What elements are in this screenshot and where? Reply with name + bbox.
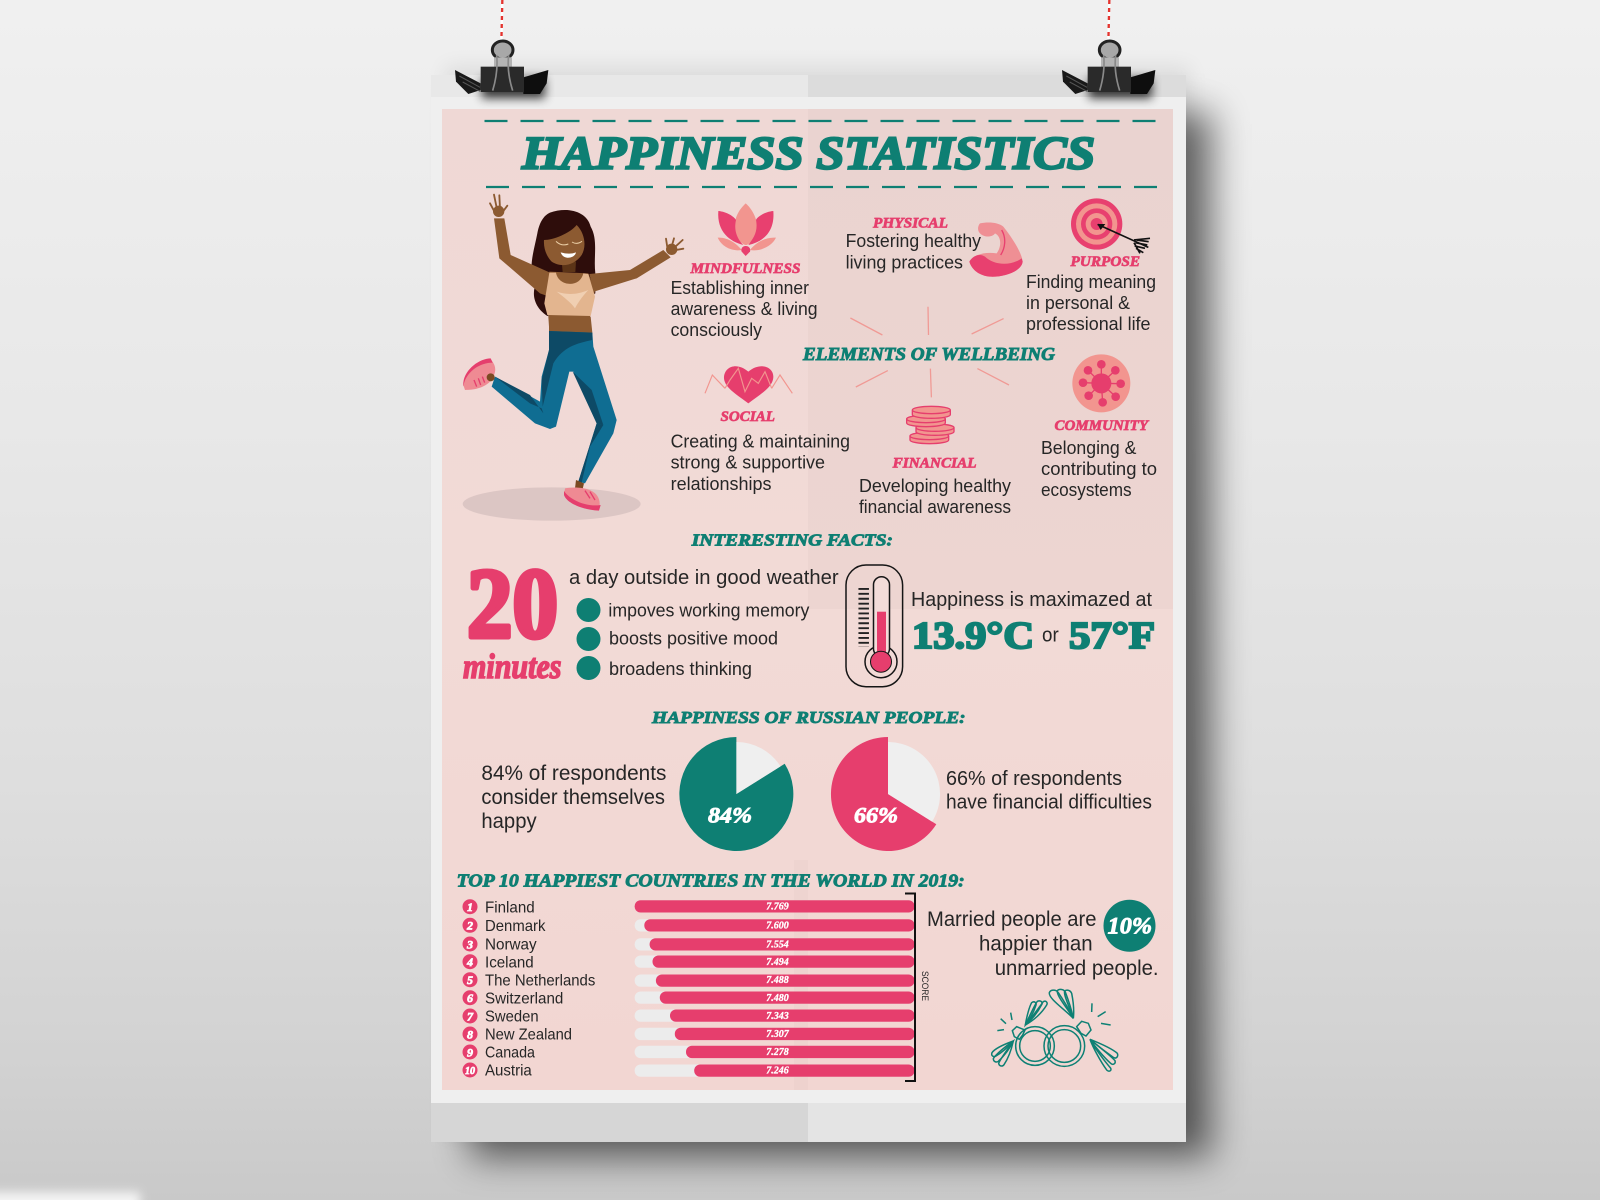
row: Austria: 7.246 [766,1066,789,1076]
row: Norway: Norway [485,936,537,954]
bar chart: top 10 countries [462,894,930,1081]
element: physical: Fostering healthy [846,231,981,251]
row: New Zealand: New Zealand [485,1027,572,1044]
row: The Netherlands [462,972,915,989]
row: Iceland: 4 [466,955,473,969]
element: physical: PHYSICAL [873,216,948,232]
element: financial: financial awareness [859,497,1011,517]
element: mindfulness: Establishing inner [671,278,809,298]
row: Switzerland: 6 [467,991,473,1005]
element: physical [846,216,1023,277]
binder clip: right [1062,0,1155,98]
row: Sweden: 7.343 [766,1011,789,1022]
row: Denmark [462,918,915,935]
icon: wedding rings [992,989,1118,1071]
row: Sweden: Sweden [485,1009,539,1026]
stat text: 84% happy: consider themselves [481,786,665,809]
element: community: COMMUNITY [1054,418,1150,434]
binder clip: left [455,0,548,98]
fact: 20 minutes: minutes [463,647,562,686]
element: social: strong & supportive [671,453,825,473]
icon: lotus [718,203,776,256]
element: mindfulness: consciously [671,320,762,340]
element: social [671,366,850,494]
badge: 10% [1104,900,1156,952]
icon: coin stacks [907,406,954,444]
row: Finland: 7.769 [766,902,789,912]
fact: 20 minutes [463,548,839,686]
row: New Zealand: 7.307 [766,1029,790,1040]
poster shadow [445,66,1212,1158]
fact: ideal temperature: or [1042,625,1059,647]
element: financial: Developing healthy [859,476,1011,496]
poster sheet [431,75,1186,1142]
pie chart: 84%: 84% [708,803,752,828]
stat text: 66% financial difficulties [946,768,1152,814]
element: community: contributing to [1041,459,1157,479]
pie chart: 84% [679,737,793,851]
row: Canada: Canada [485,1045,535,1062]
illustration: dancing woman [463,195,683,521]
row: The Netherlands: The Netherlands [485,972,595,989]
row: New Zealand [462,1026,915,1044]
row: The Netherlands: 5 [467,973,473,987]
row: Sweden [462,1008,915,1026]
row: Switzerland: 7.480 [766,993,789,1004]
element: social: relationships [671,474,772,494]
fact: ideal temperature: Happiness is maximazed at [911,589,1152,611]
element: physical: living practices [846,252,963,272]
stat text: 66% financial difficulties: have financial difficulties [946,792,1152,814]
heading: interesting facts: INTERESTING FACTS: [691,531,893,550]
element: purpose: in personal & [1026,293,1130,313]
row: Denmark: 2 [466,919,473,933]
row: Switzerland: Switzerland [485,990,563,1007]
row: Finland [462,899,915,916]
element: financial [859,406,1011,517]
icon: network circle [1072,354,1130,412]
stat text: 66% financial difficulties: 66% of respondents [946,768,1122,790]
element: mindfulness [671,203,818,340]
list: outdoor benefits: boosts positive mood [609,628,778,648]
row: Austria [462,1062,915,1080]
row: New Zealand: 8 [467,1027,473,1041]
pie chart: 66%: 66% [854,803,898,828]
row: Austria: Austria [485,1063,532,1080]
callout: married people happier: happier than [979,933,1093,956]
row: Norway: 7.554 [766,940,789,950]
row: Norway: 3 [466,937,473,951]
callout: married people happier [927,900,1159,980]
row: Iceland: 7.494 [766,957,789,968]
fact: 20 minutes: 20 [467,548,558,659]
callout: married people happier: unmarried people. [995,957,1159,980]
axis label: score: SCORE [919,971,930,1001]
element: mindfulness: awareness & living [671,299,818,319]
row: Finland: 1 [467,900,473,914]
row: The Netherlands: 7.488 [766,975,789,986]
row: Norway [462,936,915,954]
wellbeing hub: connecting rays [850,307,1009,397]
element: community [1041,354,1157,500]
row: Canada: 9 [467,1045,473,1059]
list: outdoor benefits: broadens thinking [609,659,752,679]
badge: 10%: 10% [1108,913,1152,938]
element: community: Belonging & [1041,438,1136,458]
fact: ideal temperature: 57°F [1069,615,1155,657]
heading: elements of wellbeing: ELEMENTS OF WELLBEING [802,344,1055,364]
score axis bracket [905,894,915,1081]
row: Denmark: 7.600 [766,920,789,932]
row: Canada: 7.278 [766,1047,789,1058]
element: purpose [1026,198,1156,334]
row: Sweden: 7 [467,1009,474,1023]
fact: ideal temperature: 13.9°C [912,615,1034,657]
element: purpose: PURPOSE [1070,254,1140,270]
row: Finland: Finland [485,900,535,916]
fact: ideal temperature [846,565,1155,687]
row: Denmark: Denmark [485,918,546,935]
list: outdoor benefits [576,598,809,680]
row: Austria: 10 [465,1066,475,1077]
row: Switzerland [462,990,915,1007]
callout: married people happier: Married people are [927,908,1096,931]
icon: flexed arm [969,222,1023,277]
list: outdoor benefits: impoves working memory [608,601,809,621]
element: mindfulness: MINDFULNESS [689,261,800,277]
heading: happiness of russian people: HAPPINESS OF RUSSIAN PEOPLE: [651,708,966,727]
element: financial: FINANCIAL [892,456,977,472]
row: Iceland [462,954,915,971]
element: purpose: professional life [1026,314,1150,334]
element: social: SOCIAL [720,409,775,425]
icon: heart with pulse [705,366,792,403]
icon: target with arrow [1071,198,1150,253]
element: purpose: Finding meaning [1026,272,1156,292]
heading: top 10 happiest countries: TOP 10 HAPPIEST COUNTRIES IN THE WORLD IN 2019: [457,871,965,891]
pink content panel [442,109,1173,1090]
row: Iceland: Iceland [485,954,534,971]
element: social: Creating & maintaining [671,432,850,452]
pie chart: 66% [831,737,940,851]
icon: thermometer [846,565,903,687]
stat text: 84% happy: happy [481,810,537,833]
stat text: 84% happy: 84% of respondents [481,762,666,785]
stat text: 84% happy [481,762,666,833]
title with dashed rules: HAPPINESS STATISTICS [521,128,1095,180]
element: community: ecosystems [1041,480,1132,500]
row: Canada [462,1044,915,1062]
fact: 20 minutes: a day outside in good weather [569,567,839,589]
